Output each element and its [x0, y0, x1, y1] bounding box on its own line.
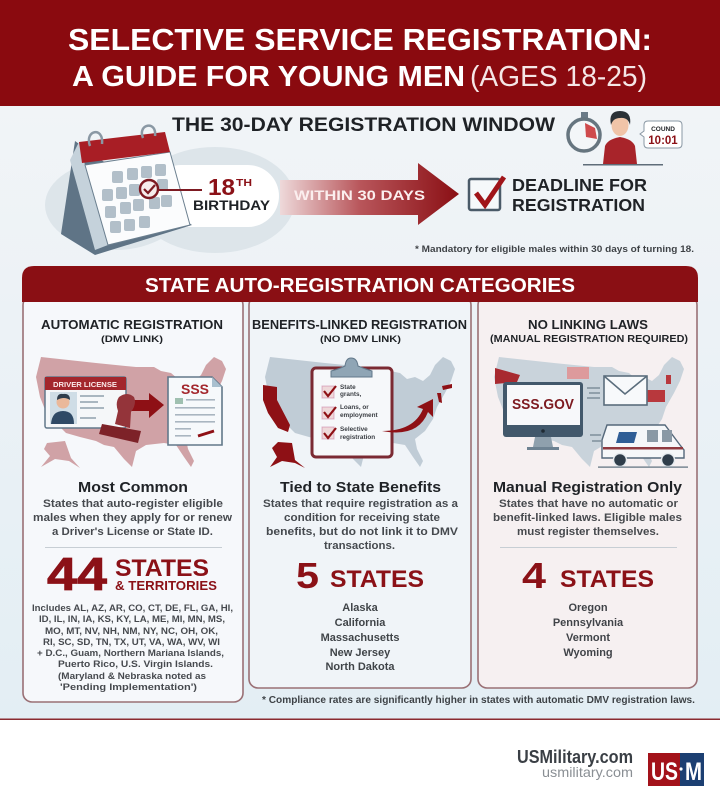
description: States that auto-register eligible [43, 498, 223, 510]
stat: 5 states: 5 [296, 555, 319, 596]
column: automatic registration [32, 318, 233, 693]
background cloud [45, 147, 295, 253]
panel: state auto-registration categories [22, 266, 698, 702]
state list: Includes AL, AZ, AR, CO, CT, DE, FL, GA, HI, [32, 603, 233, 614]
state list: ID, IL, IN, IA, KS, KY, LA, ME, MI, MN, MS, [39, 614, 225, 625]
heading: registration window: THE 30-DAY REGISTRATION WINDOW [172, 115, 555, 136]
state list: North Dakota [325, 661, 395, 673]
state list: Vermont [566, 632, 610, 644]
column: benefits-linked registration [252, 318, 467, 673]
icon: mail truck [590, 425, 688, 468]
stat: 44 states: STATES [115, 555, 209, 582]
icon: young man [583, 111, 663, 166]
state list [321, 602, 399, 673]
stat: 4 states: 4 [522, 555, 546, 596]
description: States that require registration as a [263, 498, 459, 510]
description: transactions. [324, 540, 395, 552]
stat: 4 states: STATES [560, 566, 654, 593]
footer brand: USMilitary.com [517, 747, 633, 767]
birthday pill [150, 165, 279, 227]
state list: Massachusetts [321, 632, 399, 644]
column heading: (DMV LINK) [101, 334, 163, 345]
footer brand: usmilitary.com [542, 764, 633, 780]
icon: clipboard checklist: employment [340, 412, 379, 419]
header banner: A GUIDE FOR YOUNG MEN [72, 61, 465, 93]
footer brand [517, 747, 704, 786]
birthday pill: 18 [208, 174, 235, 200]
speech bubble: countdown: 10:01 [648, 135, 678, 147]
section: 30-day window [45, 111, 694, 255]
description: males when they apply for or renew [33, 512, 232, 524]
stat: 5 states [296, 555, 424, 596]
icon: calendar [61, 126, 202, 255]
column heading: (MANUAL REGISTRATION REQUIRED) [490, 334, 688, 345]
icon: deadline checkbox [469, 177, 504, 210]
deadline text: REGISTRATION [512, 195, 645, 215]
icon: rubber stamp [99, 394, 141, 443]
section heading bar: STATE AUTO-REGISTRATION CATEGORIES [145, 275, 575, 297]
description: a Driver's License or State ID. [52, 526, 213, 538]
section heading bar [22, 266, 698, 302]
column: no linking laws [490, 318, 688, 659]
speech bubble: countdown [640, 121, 682, 148]
page background [0, 106, 720, 719]
state list [32, 603, 233, 693]
stat: 5 states: STATES [330, 566, 424, 593]
footer rule [0, 718, 720, 720]
stat: 4 states [522, 555, 654, 596]
description [263, 498, 459, 552]
description: condition for receiving state [284, 512, 440, 524]
logo: US-M: US [651, 758, 678, 786]
icon: clipboard checklist [312, 358, 392, 457]
state list: Alaska [342, 602, 379, 614]
birthday pill: TH [236, 178, 252, 189]
arrow: curved to northeast [382, 399, 433, 432]
icon: clipboard checklist: grants, [340, 391, 362, 398]
state list: Wyoming [563, 647, 613, 659]
deadline text: DEADLINE FOR [512, 175, 647, 195]
arrow: within 30 days [280, 163, 459, 225]
footer background [0, 719, 720, 811]
icon: driver license: DRIVER LICENSE [53, 380, 117, 389]
logo: US-M [648, 753, 704, 786]
icon: clipboard checklist: Selective [340, 426, 368, 433]
map: US grey with no-law states [494, 357, 684, 467]
stat: 44 states: & TERRITORIES [115, 578, 217, 593]
icon: SSS document [168, 377, 222, 445]
column heading: NO LINKING LAWS [528, 318, 648, 332]
description: States that have no automatic or [499, 498, 679, 510]
state list: RI, SC, SD, TN, TX, UT, VA, WA, WV, WI [43, 637, 220, 648]
subheading: manual registration only: Manual Registration Only [493, 479, 683, 496]
icon: clipboard checklist: Loans, or [340, 404, 369, 411]
column heading: (NO DMV LINK) [320, 334, 401, 345]
footnote: mandatory: * Mandatory for eligible males within 30 days of turning 18. [415, 244, 694, 255]
subheading: most common: Most Common [78, 479, 188, 496]
description: benefit-linked laws. Eligible males [493, 512, 682, 524]
description [493, 498, 682, 538]
description: must register themselves. [517, 526, 659, 538]
state list: 'Pending Implementation') [60, 682, 197, 693]
icon: monitor sss.gov: SSS.GOV [512, 397, 574, 413]
stat: 44 states [47, 548, 217, 600]
header banner: SELECTIVE SERVICE REGISTRATION: [68, 22, 652, 57]
icon: arrow to document [130, 393, 164, 418]
birthday pill: BIRTHDAY [193, 198, 270, 213]
speech bubble: countdown: COUND [651, 126, 675, 133]
header banner [0, 0, 720, 106]
map: US grey with highlighted states [263, 357, 455, 468]
icon: SSS document: SSS [181, 381, 209, 397]
state list: Oregon [568, 602, 608, 614]
header banner: (AGES 18-25) [470, 61, 647, 93]
icon: clipboard checklist: registration [340, 434, 375, 441]
column backgrounds [23, 296, 697, 702]
icon: stopwatch [568, 112, 600, 151]
arrow: within 30 days: WITHIN 30 DAYS [294, 187, 425, 203]
description: benefits, but do not link it to DMV [266, 526, 459, 538]
footnote: compliance: * Compliance rates are significantly higher in states with automatic DMV registration laws. [262, 695, 695, 706]
column heading [490, 318, 688, 345]
icon: envelope [587, 376, 647, 405]
deadline text [512, 175, 647, 215]
logo: US-M: M [685, 758, 702, 786]
state list: Puerto Rico, U.S. Virgin Islands. [58, 659, 213, 670]
column heading: AUTOMATIC REGISTRATION [41, 318, 223, 332]
description [33, 498, 232, 538]
icon: clipboard checklist: State [340, 384, 356, 391]
icon: monitor sss.gov [503, 382, 583, 450]
column heading: BENEFITS-LINKED REGISTRATION [252, 318, 467, 332]
state list: MO, MT, NV, NH, NM, NY, NC, OH, OK, [45, 626, 218, 637]
state list: (Maryland & Nebraska noted as [58, 671, 206, 682]
state list [553, 602, 624, 659]
state list: Pennsylvania [553, 617, 624, 629]
stat: 44 states: 44 [47, 548, 107, 600]
subheading: tied to state benefits: Tied to State Benefits [280, 479, 441, 496]
map: US pink [36, 357, 226, 468]
icon: driver license [45, 377, 126, 428]
state list: New Jersey [330, 647, 391, 659]
state list: California [335, 617, 386, 629]
state list: + D.C., Guam, Northern Mariana Islands, [37, 648, 224, 659]
column heading [41, 318, 223, 345]
column heading [252, 318, 467, 345]
